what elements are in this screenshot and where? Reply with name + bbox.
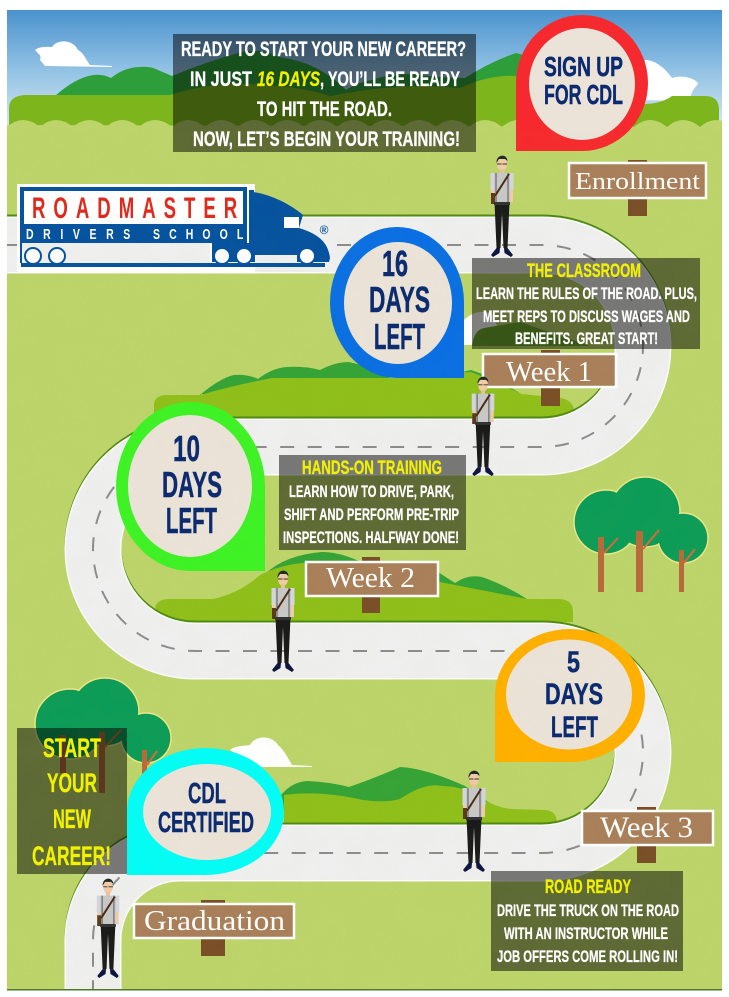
person: week 1	[472, 377, 494, 476]
logo word: drivers: DRIVERS	[26, 225, 131, 242]
text box: start your new career: YOUR	[47, 768, 97, 798]
sign post: week 1	[541, 350, 560, 406]
intro text box: NOW, LET’S BEGIN YOUR TRAINING!	[193, 128, 460, 151]
pin: 10 days left: DAYS	[162, 464, 222, 505]
pin: 16 days left: DAYS	[369, 279, 430, 320]
pin: 5 days left	[495, 629, 645, 762]
pin: 16 days left: LEFT	[374, 316, 425, 357]
sign: week 1	[483, 354, 616, 388]
pin: 10 days left: 10	[173, 428, 200, 469]
pin: sign up for cdl: FOR CDL	[544, 79, 623, 110]
text box: start your new career	[17, 728, 127, 874]
text box: hands-on training: SHIFT AND PERFORM PRE-TRIP	[284, 505, 459, 524]
intro text box: TO HIT THE ROAD.	[257, 98, 392, 121]
sign: enrollment	[569, 163, 706, 198]
intro text box: , YOU’LL BE READY	[320, 68, 460, 91]
sky	[7, 10, 722, 125]
pin: sign up for cdl	[516, 15, 648, 151]
text box: hands-on training	[279, 455, 466, 550]
trees: left group	[35, 678, 171, 793]
text box: start your new career: NEW	[53, 804, 91, 834]
far hills	[55, 51, 600, 100]
text box: the classroom: THE CLASSROOM	[527, 261, 641, 282]
cloud: lower middle	[230, 738, 312, 767]
sign: week 2	[306, 562, 438, 596]
pin: cdl certified	[127, 748, 284, 875]
sign post: week 3	[637, 807, 656, 863]
registered mark: ®	[320, 223, 329, 237]
sign post: graduation	[201, 900, 225, 956]
intro text box	[173, 34, 476, 152]
text box: start your new career: CAREER!	[32, 841, 111, 871]
text box: the classroom	[472, 258, 700, 349]
hill group: under CDL pin	[281, 767, 557, 823]
green band with scalloped edge	[9, 76, 719, 127]
sign: week 3: Week 3	[600, 811, 693, 844]
road	[7, 243, 643, 990]
pin: 5 days left: LEFT	[551, 711, 598, 744]
pin: cdl certified: CERTIFIED	[158, 807, 254, 839]
pin: 10 days left: LEFT	[166, 500, 217, 541]
sign: week 3	[582, 811, 713, 845]
text box: hands-on training: LEARN HOW TO DRIVE, PARK,	[289, 482, 454, 501]
person: week 2	[272, 571, 294, 672]
person: week 3	[462, 771, 486, 872]
person: enrollment	[490, 156, 514, 257]
hill group: under week 2	[155, 552, 573, 622]
hill group: under week 1	[154, 362, 574, 418]
text box: road ready	[491, 871, 683, 971]
small hill: behind classroom box	[472, 322, 590, 346]
truck logo	[17, 184, 330, 272]
bottom edge line	[7, 989, 722, 990]
sign: week 2: Week 2	[326, 562, 415, 594]
text box: start your new career: START	[43, 733, 101, 763]
cloud: behind classroom box	[464, 312, 505, 345]
pin: 5 days left: DAYS	[545, 678, 603, 711]
cloud: top left	[35, 41, 112, 67]
text box: road ready: ROAD READY	[545, 877, 631, 898]
logo word: school: SCHOOL	[153, 225, 243, 242]
pin: 5 days left: 5	[567, 646, 580, 679]
pin: 16 days left: 16	[382, 243, 408, 284]
sign: graduation: Graduation	[144, 905, 286, 937]
text box: the classroom: BENEFITS. GREAT START!	[515, 329, 658, 348]
logo word: roadmaster: ROADMASTER	[32, 192, 237, 225]
sign post: enrollment	[628, 160, 647, 216]
sign: week 1: Week 1	[506, 356, 592, 388]
pin: sign up for cdl: SIGN UP	[544, 51, 623, 82]
text box: hands-on training: INSPECTIONS. HALFWAY DONE!	[283, 528, 459, 547]
pin: 16 days left	[330, 227, 464, 378]
cloud: top right	[640, 60, 698, 101]
pin: cdl certified: CDL	[188, 778, 226, 810]
trees: right group	[574, 477, 708, 592]
intro text box: 16 DAYS	[257, 68, 320, 91]
intro text box: READY TO START YOUR NEW CAREER?	[181, 38, 466, 61]
person: graduation	[97, 879, 119, 978]
sign: enrollment: Enrollment	[575, 169, 700, 195]
grass scallops	[10, 120, 722, 127]
pin: 10 days left	[116, 402, 265, 571]
sign post: week 2	[362, 557, 380, 613]
text box: hands-on training: HANDS-ON TRAINING	[302, 458, 442, 479]
intro text box: IN JUST	[190, 68, 252, 91]
